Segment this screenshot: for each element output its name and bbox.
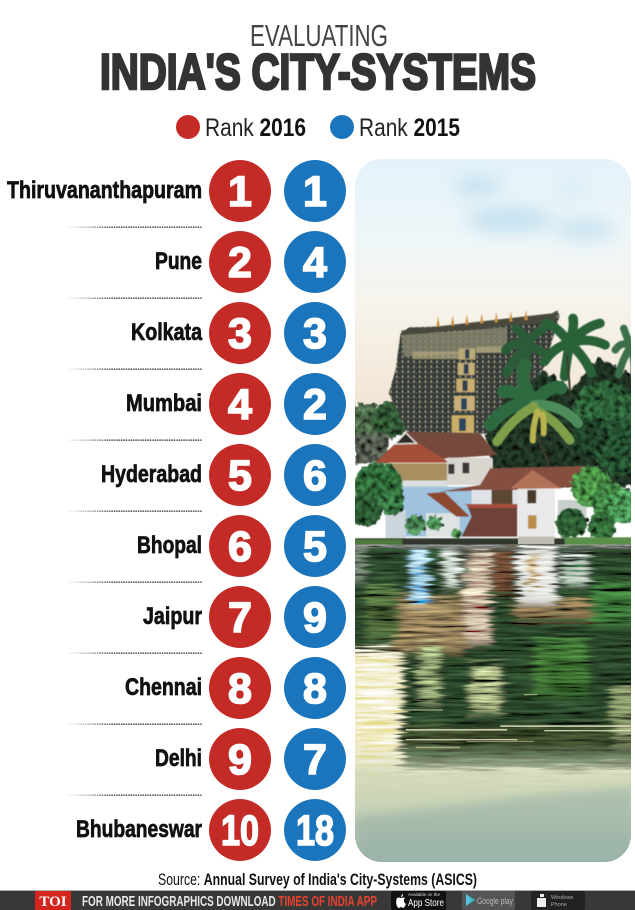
legend label: rank 2015: Rank 2015 — [359, 114, 460, 142]
left house — [375, 432, 587, 539]
palm crowns — [490, 318, 634, 465]
city names — [7, 177, 203, 843]
rank 2016 badges: 10 — [221, 807, 259, 855]
legend marker: rank 2016 — [176, 115, 200, 139]
app store badge — [391, 891, 446, 910]
rank 2016 badges: 9 — [228, 736, 252, 784]
google play badge: Google play — [477, 896, 513, 906]
rank 2015 badges: 1 — [303, 168, 327, 216]
rank 2016 badges — [209, 160, 271, 861]
rank 2016 badges: 6 — [228, 523, 252, 571]
pale lower water — [355, 743, 635, 863]
city names: Bhubaneswar — [76, 816, 202, 843]
toi logo: TOI — [39, 894, 67, 910]
right dark trees — [485, 357, 635, 487]
rank 2015 badges: 2 — [303, 381, 327, 429]
rank 2015 badges: 4 — [303, 239, 327, 287]
windows phone badge: Windows — [551, 895, 574, 901]
city names: Bhopal — [137, 532, 202, 559]
city names: Delhi — [155, 745, 202, 772]
city names: Pune — [155, 248, 202, 275]
water highlights — [406, 684, 635, 748]
legend marker: rank 2015 — [330, 115, 354, 139]
rank 2015 badges: 5 — [303, 523, 327, 571]
photo: temple and tank — [335, 159, 635, 872]
rank 2016 badges: 8 — [228, 665, 252, 713]
rank 2016 badges: 5 — [228, 452, 252, 500]
footer message: FOR MORE INFOGRAPHICS DOWNLOAD TIMES OF INDIA APP — [82, 894, 377, 910]
city names: Chennai — [125, 674, 202, 701]
rank 2015 badges — [284, 160, 346, 861]
rank 2015 badges: 3 — [303, 310, 327, 358]
rank 2016 badges: 4 — [228, 381, 252, 429]
rank 2016 badges: 3 — [228, 310, 252, 358]
title — [100, 18, 536, 100]
city names: Kolkata — [131, 319, 203, 346]
rank 2016 badges: 2 — [228, 239, 252, 287]
app store badge: App Store — [408, 898, 444, 909]
app store badge: Available on the — [408, 892, 440, 897]
windows phone badge — [531, 891, 585, 910]
rank 2015 badges: 6 — [303, 452, 327, 500]
legend label: rank 2016: Rank 2016 — [205, 114, 306, 142]
title line: evaluating: EVALUATING — [250, 18, 388, 53]
google play badge — [462, 891, 515, 910]
city names: Hyderabad — [101, 461, 202, 488]
city names: Mumbai — [126, 390, 202, 417]
source line: Source: Annual Survey of India's City-Systems (ASICS) — [158, 870, 477, 889]
rank 2015 badges: 8 — [303, 665, 327, 713]
temple gopuram windows — [458, 348, 475, 360]
left background foliage — [355, 400, 407, 466]
right house — [440, 466, 585, 492]
legend — [176, 114, 460, 142]
windows phone badge: Phone — [551, 902, 567, 908]
rank 2016 badges: 1 — [228, 168, 252, 216]
temple tower — [389, 310, 559, 435]
rank 2015 badges: 18 — [296, 807, 334, 855]
rank 2016 badges: 7 — [228, 594, 252, 642]
footer bar — [0, 890, 635, 910]
foreground greenery — [348, 463, 635, 541]
city names: Jaipur — [143, 603, 202, 630]
city names: Thiruvananthapuram — [7, 177, 202, 204]
rank 2015 badges: 9 — [303, 594, 327, 642]
water reflection — [355, 544, 631, 862]
toi logo — [35, 891, 71, 910]
rank 2015 badges: 7 — [303, 736, 327, 784]
